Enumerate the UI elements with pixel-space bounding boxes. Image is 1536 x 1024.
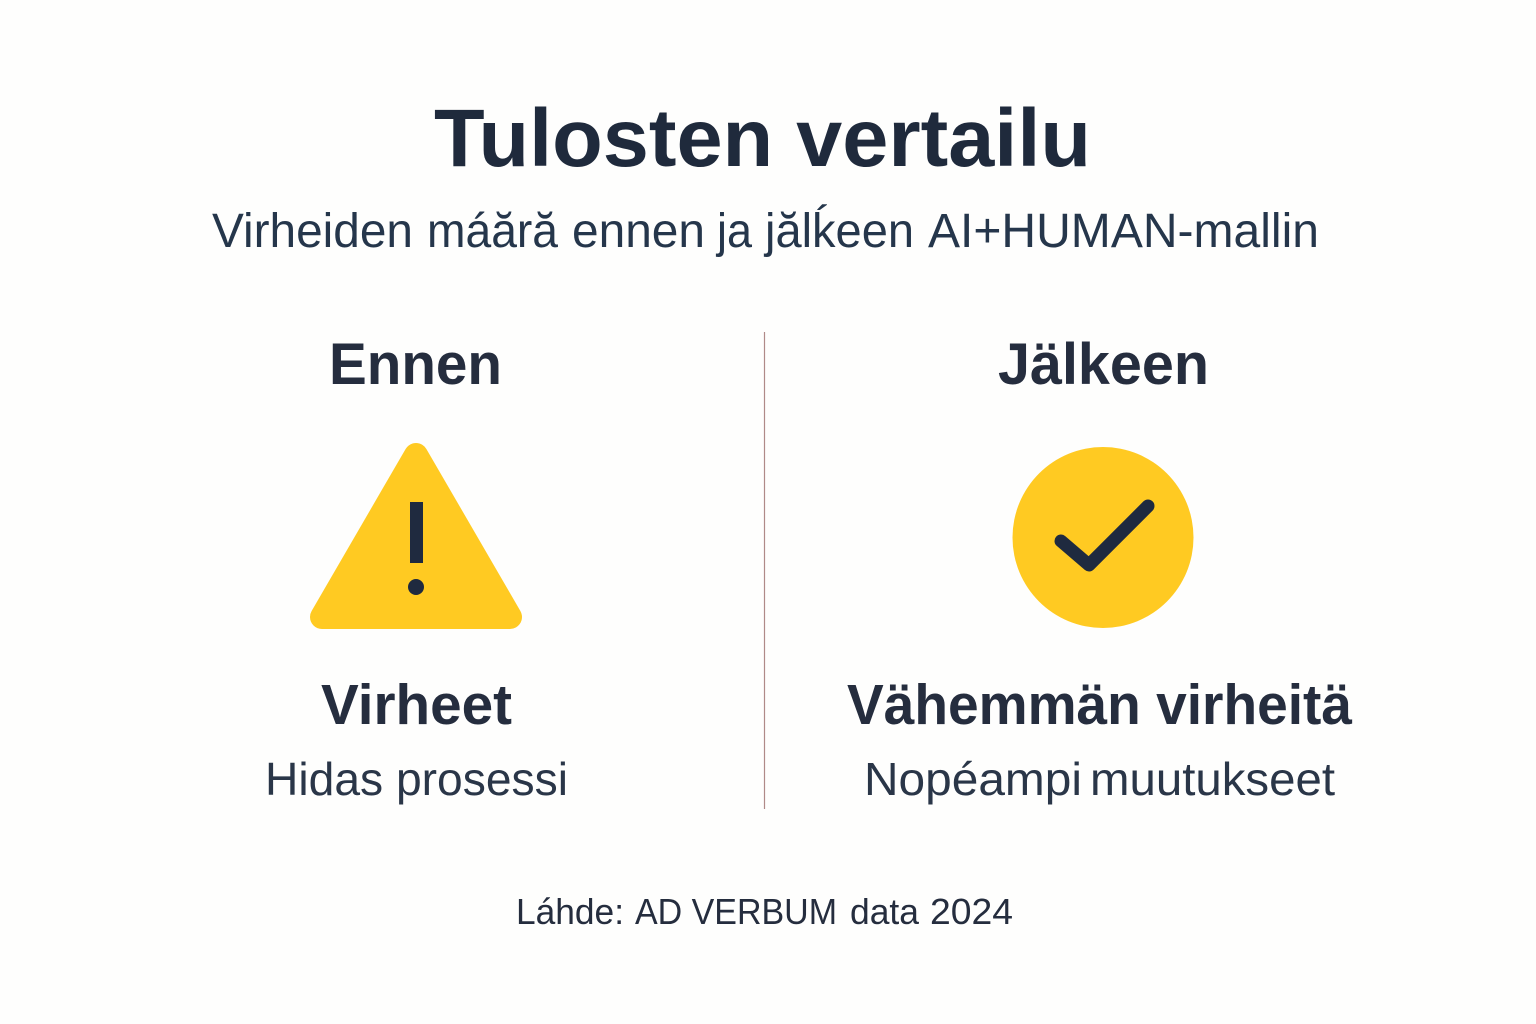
heading: Ennen: Ennen (329, 332, 502, 397)
description: Nopéampi muutukseet: Nopéampi (864, 753, 1082, 805)
icon: check circle (1012, 447, 1194, 628)
heading: Jälkeen: Jälkeen (998, 332, 1209, 397)
source note: 2024 (930, 891, 1013, 932)
subtitle: máără (427, 205, 558, 258)
title: Tulosten vertailu (434, 93, 1091, 184)
subtitle: ja (715, 205, 752, 258)
panel: before (265, 332, 568, 805)
description: Nopéampi muutukseet: muutukseet (1090, 753, 1335, 805)
description: Nopéampi muutukseet (864, 753, 1335, 805)
subtitle (212, 204, 1319, 258)
subtitle: Virheiden (212, 205, 413, 258)
label: Vähemmän virheitä: Vähemmän virheitä (847, 673, 1352, 737)
subtitle: jălḱeen (763, 204, 914, 258)
subtitle: ennen (572, 205, 705, 258)
source note: data (850, 891, 920, 932)
description: Hidas prosessi: Hidas prosessi (265, 753, 568, 805)
subtitle: AI+HUMAN-mallin (928, 205, 1319, 258)
source note: Láhde: (516, 891, 624, 932)
icon: warning triangle (322, 455, 510, 617)
source note (516, 891, 1013, 932)
panel: after (847, 332, 1352, 805)
source note: AD VERBUM (635, 891, 837, 932)
label: Virheet: Virheet (321, 673, 512, 737)
